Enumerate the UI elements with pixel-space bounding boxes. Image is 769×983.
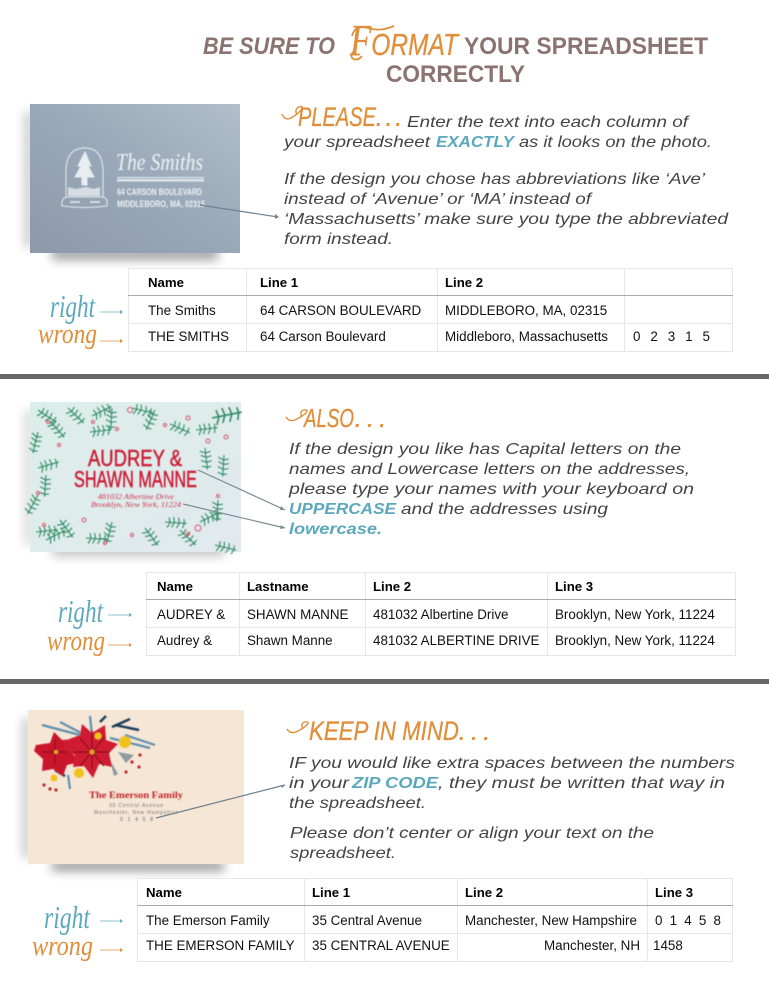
- envelope names: AUDREY &: [88, 445, 182, 471]
- text block: also: lowercase.: [289, 521, 382, 538]
- text block: please: instead of ‘Avenue’ or ‘MA’ instead of: [284, 191, 593, 208]
- label: right: right: [50, 288, 96, 324]
- text block: also: If the design you like has Capital letters on the: [289, 441, 681, 458]
- table: example 1: [128, 268, 733, 352]
- table: example 1: 64 CARSON BOULEVARD: [260, 303, 422, 318]
- text block: keep in mind: Please don’t center or align your text on the: [290, 825, 654, 842]
- text block: please: If the design you chose has abbreviations like ‘Ave’: [284, 171, 706, 188]
- envelope: The Emerson Family: [22, 710, 244, 871]
- envelope: The Emerson Family: Manchester, New Hampshire: [94, 810, 178, 816]
- heading: please: PLEASE: [298, 102, 377, 132]
- text block: please: EXACTLY: [436, 134, 515, 151]
- divider: [0, 679, 769, 684]
- envelope: The Smiths: [24, 104, 240, 260]
- table: example 2: SHAWN MANNE: [247, 607, 348, 622]
- envelope: Audrey and Shawn: [24, 398, 244, 558]
- text block: please: Enter the text into each column of: [407, 114, 690, 131]
- text block: keep in mind: ZIP CODE: [351, 775, 440, 792]
- table: example 3: Name: [146, 885, 182, 900]
- heading: keep in mind: KEEP IN MIND: [309, 716, 459, 746]
- heading: also: ALSO: [303, 403, 354, 433]
- table: example 3: Manchester, NH: [544, 938, 640, 953]
- table: example 2: 481032 ALBERTINE DRIVE: [373, 633, 540, 648]
- envelope: The Emerson Family: 0 1 4 5 8: [120, 817, 153, 823]
- red berries: [36, 408, 228, 544]
- envelope name and address: The Smiths: [116, 150, 203, 176]
- icon: snow globe: [62, 148, 107, 208]
- envelope: The Smiths: MIDDLEBORO, MA, 02315: [117, 199, 205, 209]
- text block: also: [288, 441, 694, 538]
- table: example 2: [146, 572, 736, 656]
- envelope: The Smiths: 64 CARSON BOULEVARD: [117, 187, 202, 197]
- table: example 1: 0 2 3 1 5: [633, 329, 710, 344]
- table: example 3: Line 3: [655, 885, 693, 900]
- title: BE SURE TO: [203, 33, 335, 60]
- text block: keep in mind: IF you would like extra spaces between the numbers: [289, 755, 735, 772]
- table: example 3: 1458: [653, 938, 683, 953]
- table: example 3: Manchester, New Hampshire: [465, 913, 637, 928]
- table: example 3: THE EMERSON FAMILY: [146, 938, 295, 953]
- table: example 3: Line 2: [465, 885, 503, 900]
- table: example 1: Name: [148, 275, 184, 290]
- text block: keep in mind: the spreadsheet.: [289, 795, 426, 812]
- label: right: right: [44, 899, 91, 935]
- title: FORMAT: [349, 16, 460, 65]
- table: example 2: Line 2: [373, 579, 411, 594]
- text block: also: names and Lowercase letters on the addresses,: [289, 461, 690, 478]
- foliage border: [24, 398, 244, 558]
- table: example 1: Middleboro, Massachusetts: [445, 329, 608, 344]
- table: example 1: MIDDLEBORO, MA, 02315: [445, 303, 607, 318]
- arrow: zip callout: [156, 785, 285, 818]
- table: example 3: 0 1 4 5 8: [655, 913, 721, 928]
- text block: also: please type your names with your keyboard on: [288, 481, 694, 498]
- label: wrong: wrong: [47, 626, 105, 657]
- text block: keep in mind: , they must be written that way in: [438, 775, 725, 792]
- text block: please: [283, 114, 729, 248]
- table: example 2: AUDREY &: [157, 607, 225, 622]
- label: right: right: [58, 593, 104, 629]
- heading: keep in mind: ...: [459, 723, 489, 745]
- text block: keep in mind: [289, 755, 735, 862]
- text block: keep in mind: in your: [289, 775, 350, 792]
- text block: please: as it looks on the photo.: [519, 134, 712, 151]
- text block: please: ‘Massachusetts’ make sure you type the abbreviated: [284, 211, 729, 228]
- heading: also: ...: [355, 410, 385, 432]
- table: example 1: Line 1: [260, 275, 298, 290]
- table: example 1: THE SMITHS: [148, 329, 229, 344]
- text block: also: UPPERCASE: [289, 501, 397, 518]
- arrow: address callout: [183, 504, 285, 529]
- table: example 2: Name: [157, 579, 193, 594]
- table: example 2: Brooklyn, New York, 11224: [555, 633, 715, 648]
- text block: please: your spreadsheet: [283, 134, 431, 151]
- label: wrong: wrong: [38, 319, 97, 350]
- heading: please: ...: [376, 109, 401, 131]
- table: example 3: The Emerson Family: [146, 913, 270, 928]
- table: example 3: Line 1: [312, 885, 350, 900]
- table: example 2: Line 3: [555, 579, 593, 594]
- title: [203, 16, 708, 88]
- envelope address: 481032 Albertine Drive: [98, 492, 175, 501]
- text block: please: form instead.: [284, 231, 393, 248]
- arrow: name callout: [198, 470, 285, 510]
- divider: [0, 374, 769, 379]
- table: example 2: Brooklyn, New York, 11224: [555, 607, 715, 622]
- table: example 2: Audrey &: [157, 633, 212, 648]
- envelope: The Emerson Family: 35 Central Avenue: [109, 803, 163, 809]
- label: wrong: wrong: [32, 930, 93, 962]
- envelope: Audrey and Shawn: SHAWN MANNE: [74, 466, 197, 492]
- table: example 3: [137, 878, 733, 962]
- table: example 3: 35 CENTRAL AVENUE: [312, 938, 450, 953]
- title: YOUR SPREADSHEET: [464, 33, 708, 60]
- table: example 1: The Smiths: [148, 303, 216, 318]
- text block: keep in mind: spreadsheet.: [290, 845, 396, 862]
- poinsettia bouquet: [34, 716, 155, 792]
- table: example 2: 481032 Albertine Drive: [373, 607, 508, 622]
- table: example 1: 64 Carson Boulevard: [260, 329, 386, 344]
- table: example 3: 35 Central Avenue: [312, 913, 422, 928]
- text block: also: and the addresses using: [401, 501, 608, 518]
- title: CORRECTLY: [386, 61, 525, 88]
- table: example 2: Shawn Manne: [247, 633, 333, 648]
- table: example 2: Lastname: [247, 579, 309, 594]
- envelope: Audrey and Shawn: Brooklyn, New York, 11224: [91, 500, 181, 509]
- envelope name and address: The Emerson Family: [89, 790, 184, 800]
- table: example 1: Line 2: [445, 275, 483, 290]
- arrow: zip callout: [200, 205, 279, 219]
